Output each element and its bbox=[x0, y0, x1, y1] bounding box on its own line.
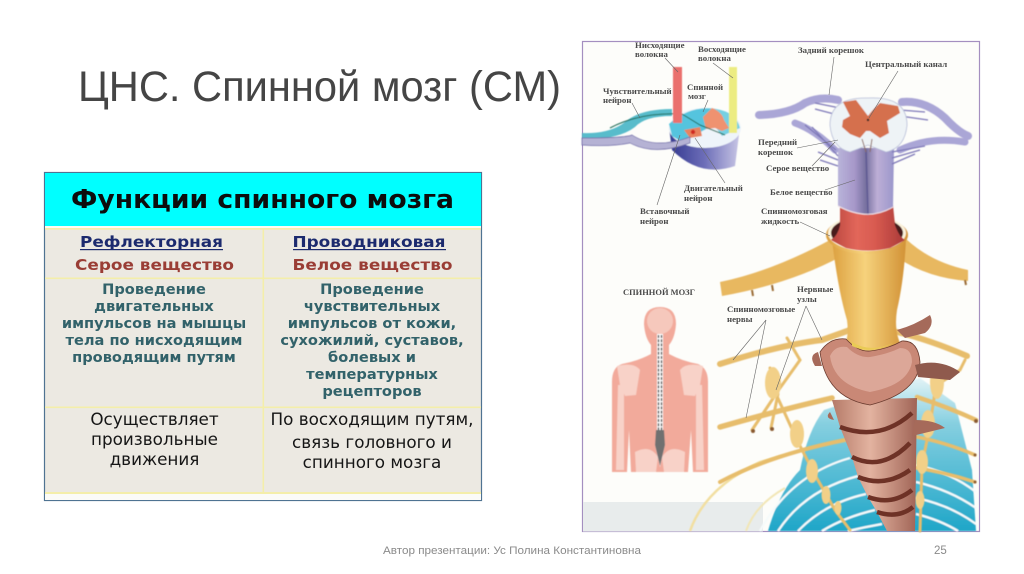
label: anterior root: Передний bbox=[758, 137, 797, 147]
text block: ascending paths bbox=[270, 409, 474, 472]
title: ЦНС. Спинной мозг (СМ) bbox=[78, 63, 561, 111]
illustration frame bbox=[582, 42, 980, 532]
column heading: reflex bbox=[75, 233, 234, 274]
label: spinal cord: мозг bbox=[688, 91, 706, 101]
column heading: conduction: Проводниковая bbox=[292, 233, 446, 251]
label: sensory neuron: Чувствительный bbox=[603, 86, 672, 96]
footer: page number: 25 bbox=[934, 545, 947, 557]
column heading: reflex: Рефлекторная bbox=[80, 233, 223, 251]
table background bbox=[44, 172, 482, 500]
text block: conduction description: болевых и bbox=[328, 349, 416, 366]
label: motor neuron: Двигательный bbox=[684, 183, 743, 193]
column heading: conduction bbox=[292, 233, 452, 274]
label: cerebrospinal fluid: Спинномозговая bbox=[761, 206, 828, 216]
label: descending fibres: Нисходящие bbox=[635, 40, 685, 50]
label: posterior root: Задний корешок bbox=[798, 45, 865, 55]
text block: conduction description bbox=[280, 281, 464, 400]
text block: conduction description: импульсов от кожи, bbox=[288, 315, 456, 332]
label: anterior root: корешок bbox=[758, 147, 794, 157]
label: interneuron: Вставочный bbox=[640, 206, 689, 216]
text block: reflex description: импульсов на мышцы bbox=[62, 315, 246, 332]
text block: conduction description: температурных bbox=[306, 366, 438, 383]
column heading: reflex: Серое вещество bbox=[75, 256, 234, 274]
label: ascending fibres: Восходящие bbox=[698, 44, 746, 54]
label: sensory neuron: нейрон bbox=[603, 95, 631, 105]
text block: reflex description: проводящим путям bbox=[72, 349, 236, 366]
diagram: spinal cord column and cross-section bbox=[759, 98, 968, 250]
text block: voluntary movement: Осуществляет bbox=[90, 409, 219, 429]
text block: conduction description: сухожилий, суставов, bbox=[280, 332, 464, 349]
label: white matter: Белое вещество bbox=[770, 187, 833, 197]
text block: ascending paths: спинного мозга bbox=[303, 452, 441, 472]
label: grey matter: Серое вещество bbox=[766, 163, 830, 173]
text block: voluntary movement: движения bbox=[110, 449, 199, 469]
text block: ascending paths: связь головного и bbox=[292, 432, 452, 452]
text block: voluntary movement: произвольные bbox=[91, 429, 218, 449]
text block: voluntary movement bbox=[90, 409, 219, 469]
label: cerebrospinal fluid: жидкость bbox=[761, 216, 799, 226]
table heading: Функции спинного мозга bbox=[71, 185, 454, 215]
text block: reflex description: Проведение bbox=[102, 281, 206, 298]
diagram: dura mater with nerves bbox=[720, 215, 968, 352]
text block: conduction description: Проведение bbox=[320, 281, 424, 298]
leader lines: lower diagram bbox=[733, 306, 822, 418]
footer: author: Автор презентации: Ус Полина Константиновна bbox=[383, 545, 642, 557]
diagram: rib and sympathetic background bbox=[690, 378, 976, 531]
label: spinal cord: Спинной bbox=[687, 82, 723, 92]
bottom grey band bbox=[583, 502, 763, 532]
leader lines: segment diagram bbox=[632, 58, 733, 205]
diagram: vertebra column bbox=[812, 315, 960, 531]
label: nerve ganglia: узлы bbox=[797, 294, 817, 304]
text block: conduction description: чувствительных bbox=[304, 298, 441, 315]
label: ascending fibres: волокна bbox=[698, 53, 731, 63]
panel: functions table bbox=[44, 172, 482, 500]
table header band bbox=[45, 173, 481, 226]
diagram: spinal nerves and ganglia bbox=[720, 330, 978, 531]
label: nerve ganglia: Нервные bbox=[797, 284, 833, 294]
diagram: back silhouette with spine bbox=[612, 307, 708, 472]
label: spinal cord (back view): СПИННОЙ МОЗГ bbox=[623, 287, 695, 297]
panel: spinal cord illustration bbox=[582, 40, 980, 532]
label: interneuron: нейрон bbox=[640, 216, 668, 226]
label: spinal nerves: Спинномозговые bbox=[727, 304, 795, 314]
text block: reflex description: двигательных bbox=[94, 298, 214, 315]
label: spinal nerves: нервы bbox=[727, 314, 753, 324]
text block: reflex description: тела по нисходящим bbox=[65, 332, 243, 349]
label: central canal: Центральный канал bbox=[865, 59, 947, 69]
leader lines: cord diagram bbox=[797, 57, 898, 236]
diagram: spinal segment with neurons bbox=[582, 67, 741, 170]
text block: ascending paths: По восходящим путям, bbox=[270, 409, 474, 429]
column heading: conduction: Белое вещество bbox=[292, 256, 452, 274]
text block: reflex description bbox=[62, 281, 246, 366]
label: motor neuron: нейрон bbox=[684, 193, 712, 203]
label: descending fibres: волокна bbox=[635, 49, 668, 59]
text block: conduction description: рецепторов bbox=[322, 383, 422, 400]
